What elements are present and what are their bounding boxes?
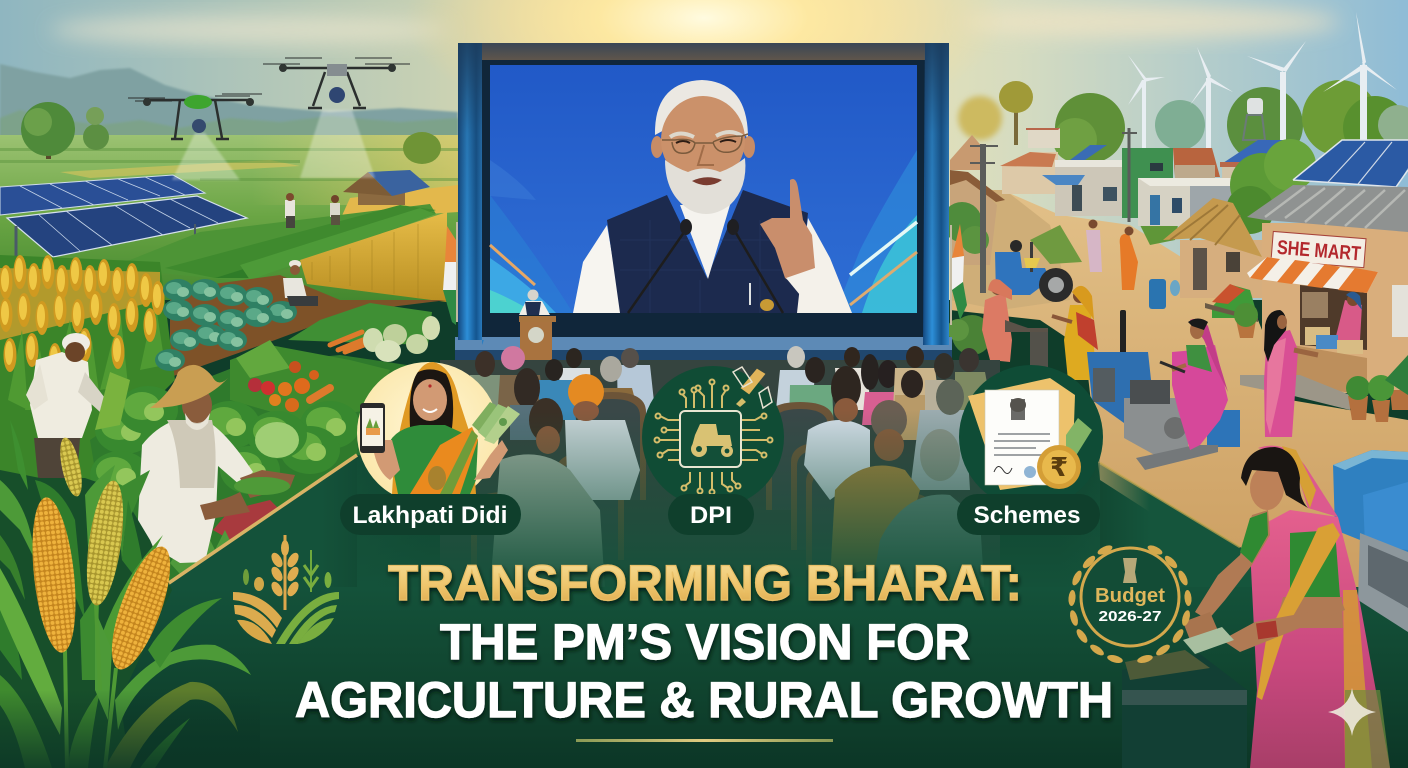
- stage platform: [455, 337, 952, 350]
- man in white-blue shirt: [804, 366, 870, 500]
- carrots and pale cabbages: [288, 303, 440, 362]
- green bottom band: [0, 410, 1408, 768]
- brows and eyes: [670, 132, 742, 137]
- hazy trees behind village: [958, 80, 1408, 163]
- left sleeve and arm: [1195, 510, 1270, 620]
- pin and pen: [749, 283, 751, 305]
- distant houses: [950, 128, 1060, 265]
- woman on blue machine: [1087, 310, 1240, 470]
- screen: [490, 65, 917, 313]
- back tractor: [995, 240, 1073, 302]
- shop counter: [1293, 345, 1367, 395]
- left farm scene: [0, 58, 458, 587]
- gold left edge: [163, 455, 357, 587]
- panel: DPI: [642, 366, 784, 535]
- foreground cabbages: [90, 386, 360, 499]
- stage and screen: [455, 43, 952, 395]
- raised hand: [760, 179, 815, 287]
- tree by shop: [1226, 139, 1316, 234]
- lower band: [0, 587, 1408, 768]
- microphones: [628, 228, 783, 313]
- bushes by flag: [947, 315, 992, 355]
- white house with blue awning: [1042, 145, 1125, 216]
- face: [661, 96, 745, 184]
- year label: 2026-27: [1098, 608, 1162, 625]
- produce under hands: [170, 500, 280, 585]
- farmer with straw hat: [137, 365, 295, 563]
- crop rows: [110, 204, 436, 282]
- circle background: [642, 366, 784, 508]
- shop solar roof: [1293, 140, 1408, 187]
- cabbage rows: [155, 279, 297, 371]
- shop sign: [1271, 231, 1366, 268]
- millet head left: [26, 495, 82, 655]
- speaker on screen: [573, 80, 852, 313]
- farmer with sheaf: [26, 333, 130, 478]
- small farmers in field: [285, 193, 340, 228]
- head and hair: [1250, 466, 1284, 510]
- front row chairs: [471, 392, 934, 600]
- nose: [698, 145, 714, 165]
- small cob near farmer: [56, 436, 86, 498]
- distant tree line: [0, 110, 458, 142]
- left flag: [443, 222, 458, 325]
- green blouse: [1290, 530, 1340, 597]
- panel: Lakhpati Didi: [340, 362, 521, 535]
- kneeling farmer: [283, 260, 318, 306]
- awning: [1247, 257, 1378, 293]
- women talking: [982, 279, 1098, 380]
- rupee coin: [1037, 445, 1081, 489]
- vegetable cart: [1205, 284, 1258, 322]
- badge: budget 2026-27: [1068, 543, 1192, 664]
- rupee coin: ₹: [1050, 453, 1068, 483]
- bottom shade: [0, 690, 260, 768]
- budget label: Budget: [1095, 585, 1165, 607]
- solar house back: [1220, 140, 1290, 180]
- potted plants: [1234, 303, 1408, 422]
- woman illustration: [372, 362, 508, 494]
- title underline: [576, 739, 833, 742]
- poster: [1392, 285, 1408, 337]
- green building: [1122, 148, 1173, 218]
- soil path: [120, 275, 447, 395]
- shopper in pink saree: [1264, 310, 1318, 437]
- orange roof house: [1173, 148, 1220, 183]
- right forearm: [1222, 597, 1345, 652]
- solar panel back: [0, 175, 205, 215]
- left tree: [942, 202, 989, 254]
- drone grey: [263, 58, 410, 108]
- label pill: [340, 494, 521, 535]
- screen swooshes: [490, 195, 573, 313]
- label pill: [957, 494, 1100, 535]
- shop interior: [1300, 285, 1367, 350]
- logo: wheat and fields: [233, 535, 339, 644]
- shop sign: SHE MART: [1276, 237, 1362, 265]
- wind turbines: [1128, 12, 1397, 180]
- stems: [65, 605, 116, 768]
- blue barrel: [1149, 279, 1180, 309]
- gold papers: [968, 378, 1075, 490]
- saree border: [1257, 523, 1340, 700]
- foreground greens bed: [90, 355, 440, 587]
- glasses: [662, 134, 748, 153]
- green fields: [0, 135, 458, 300]
- solar panel front: [7, 196, 247, 257]
- circle background: [357, 362, 499, 504]
- satellite: [733, 367, 772, 408]
- back row right: [775, 346, 992, 490]
- she mart shop: [1240, 140, 1408, 410]
- man in mustard shirt: [830, 400, 920, 580]
- sparkle mark: [1328, 688, 1376, 736]
- dark table: [1122, 650, 1247, 768]
- back row left: [466, 346, 656, 450]
- white kurta: [680, 205, 730, 279]
- title: [295, 555, 1113, 728]
- spray beams: [172, 110, 375, 180]
- podium speaker: [519, 290, 556, 372]
- mountains: [0, 64, 458, 150]
- shop corrugated roof: [1247, 185, 1408, 232]
- screen frame: [458, 43, 949, 337]
- banknote: [1066, 418, 1092, 462]
- man in teal shirt: [870, 429, 985, 600]
- wheat field: [300, 212, 447, 302]
- label pill: DPI: [690, 502, 732, 529]
- right flag: [950, 224, 967, 325]
- leaf backdrop: [0, 470, 172, 768]
- walking women: [1086, 220, 1138, 290]
- phone: [360, 403, 385, 453]
- blue storage bins: [1333, 450, 1408, 632]
- pallu edge: [1343, 590, 1372, 768]
- drone green: [128, 94, 262, 139]
- ears: [651, 136, 663, 158]
- millet head right: [100, 540, 182, 676]
- title line 2: THE PM’S VISION FOR: [440, 614, 970, 670]
- woman in pink saree at cash box: [1122, 446, 1408, 768]
- millet crop field: [0, 255, 175, 490]
- beard: [665, 158, 745, 214]
- background sky: [0, 0, 1408, 300]
- lower leaves: [0, 535, 251, 768]
- circle background: [959, 365, 1103, 509]
- label pill: Lakhpati Didi: [352, 502, 508, 529]
- ring: [1081, 548, 1179, 646]
- millet head centre: [80, 478, 130, 608]
- utility poles: [970, 128, 1137, 293]
- document: [985, 390, 1059, 485]
- title line 1: TRANSFORMING BHARAT:: [388, 555, 1022, 611]
- emblem: [1123, 558, 1137, 583]
- title line 3: AGRICULTURE & RURAL GROWTH: [295, 672, 1113, 728]
- banknotes: [472, 402, 520, 444]
- left diagonal green: [163, 455, 430, 600]
- water tower: [1243, 98, 1265, 140]
- shed with solar roof: [343, 170, 430, 205]
- tall millet foreground: [0, 420, 260, 768]
- panel: Schemes: [957, 365, 1103, 535]
- circuit traces: [654, 380, 772, 494]
- harvested vegetables: [230, 340, 390, 420]
- label pill: [668, 494, 754, 535]
- ground road: [950, 190, 1408, 640]
- right village scene: [942, 12, 1408, 640]
- upper leaves: [0, 420, 150, 680]
- tractor chip: [680, 411, 741, 467]
- audience fade: [357, 410, 1100, 595]
- stage curtains: [458, 43, 949, 345]
- laurels: [1068, 543, 1192, 664]
- hair: [655, 80, 748, 138]
- hand and cash: [1183, 612, 1222, 640]
- gold right edge: [1100, 463, 1240, 547]
- veil: [1258, 446, 1338, 517]
- right diagonal green: [1060, 463, 1408, 768]
- label pill: Schemes: [974, 502, 1080, 529]
- trees: [21, 102, 441, 164]
- thatched hut: [1163, 198, 1262, 298]
- midriff: [1275, 597, 1343, 628]
- front man grey shirt: [490, 398, 605, 590]
- mouth: [692, 177, 722, 185]
- audience backdrop: [440, 360, 1000, 600]
- audience: [440, 346, 1000, 600]
- orange turban man: [565, 374, 640, 500]
- navy vest: [607, 190, 808, 313]
- low white house: [1138, 178, 1245, 226]
- saree body: [1250, 510, 1390, 768]
- kurta sleeves: [573, 225, 622, 313]
